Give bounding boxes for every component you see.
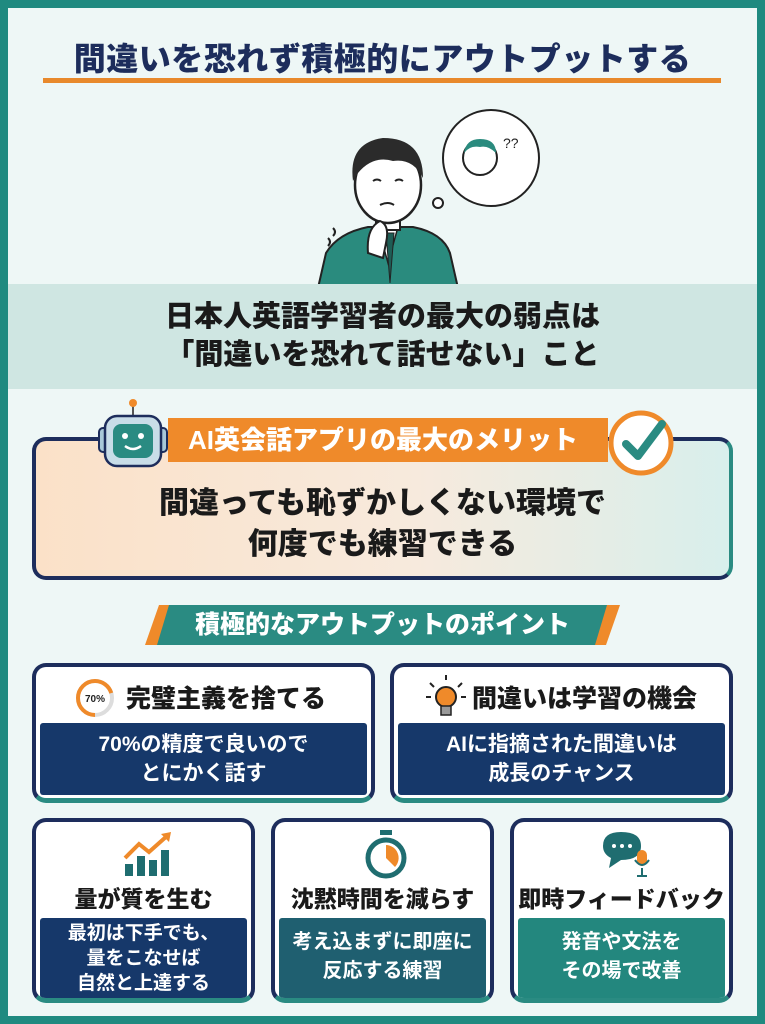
panel: biggest merit xyxy=(32,437,733,580)
card: quantity: 量をこなせば xyxy=(86,948,200,969)
card: instant feedback: その場で改善 xyxy=(562,960,682,982)
merit header tab xyxy=(168,418,608,462)
card: instant feedback: 即時フィードバック xyxy=(518,886,725,912)
card: reduce silence xyxy=(271,818,494,1003)
illustration: worried man with thought bubble: ?? xyxy=(503,135,519,151)
card: instant feedback xyxy=(510,818,733,1003)
card: reduce silence: 考え込まずに即座に xyxy=(292,931,472,953)
card: instant feedback: 発音や文法を xyxy=(562,931,682,953)
illustration: worried man with thought bubble xyxy=(318,109,540,284)
card: quantity: 最初は下手でも、 xyxy=(68,923,219,944)
icon: check circle xyxy=(608,410,674,476)
icon: stopwatch xyxy=(366,830,406,878)
icon: 70% ring xyxy=(76,679,114,717)
card: quantity: 量が質を生む xyxy=(74,886,212,912)
icon: robot xyxy=(98,399,168,468)
card: reduce silence: 沈黙時間を減らす xyxy=(291,886,474,912)
card: abandon perfectionism: 70%の精度で良いので xyxy=(98,733,309,756)
card: abandon perfectionism: とにかく話す xyxy=(140,762,266,785)
card: mistakes are learning xyxy=(390,663,733,803)
card: abandon perfectionism: 完璧主義を捨てる xyxy=(126,685,326,713)
ribbon heading: output points xyxy=(145,605,620,645)
band: key weakness: 日本人英語学習者の最大の弱点は xyxy=(165,301,600,333)
card: reduce silence: 反応する練習 xyxy=(322,960,442,982)
card: mistakes are learning: AIに指摘された間違いは xyxy=(446,733,677,756)
title: 間違いを恐れず積極的にアウトプットする xyxy=(74,41,691,77)
icon: light bulb xyxy=(426,675,466,716)
panel: biggest merit: 間違っても恥ずかしくない環境で xyxy=(159,487,606,520)
card: quantity: 自然と上達する xyxy=(77,973,210,994)
merit header tab: AI英会話アプリの最大のメリット xyxy=(188,425,578,455)
band: key weakness xyxy=(8,284,757,389)
card: mistakes are learning: 間違いは学習の機会 xyxy=(472,685,697,713)
card: abandon perfectionism xyxy=(32,663,375,803)
card: mistakes are learning: 成長のチャンス xyxy=(488,762,635,785)
ribbon heading: output points: 積極的なアウトプットのポイント xyxy=(195,611,570,639)
icon: speech bubble with mic xyxy=(603,832,650,877)
band: key weakness: 「間違いを恐れて話せない」こと xyxy=(165,339,600,371)
panel: biggest merit: 何度でも練習できる xyxy=(248,528,517,561)
icon: growth chart xyxy=(124,832,171,876)
icon: 70% ring: 70% xyxy=(85,694,105,705)
card: quantity xyxy=(32,818,255,1003)
